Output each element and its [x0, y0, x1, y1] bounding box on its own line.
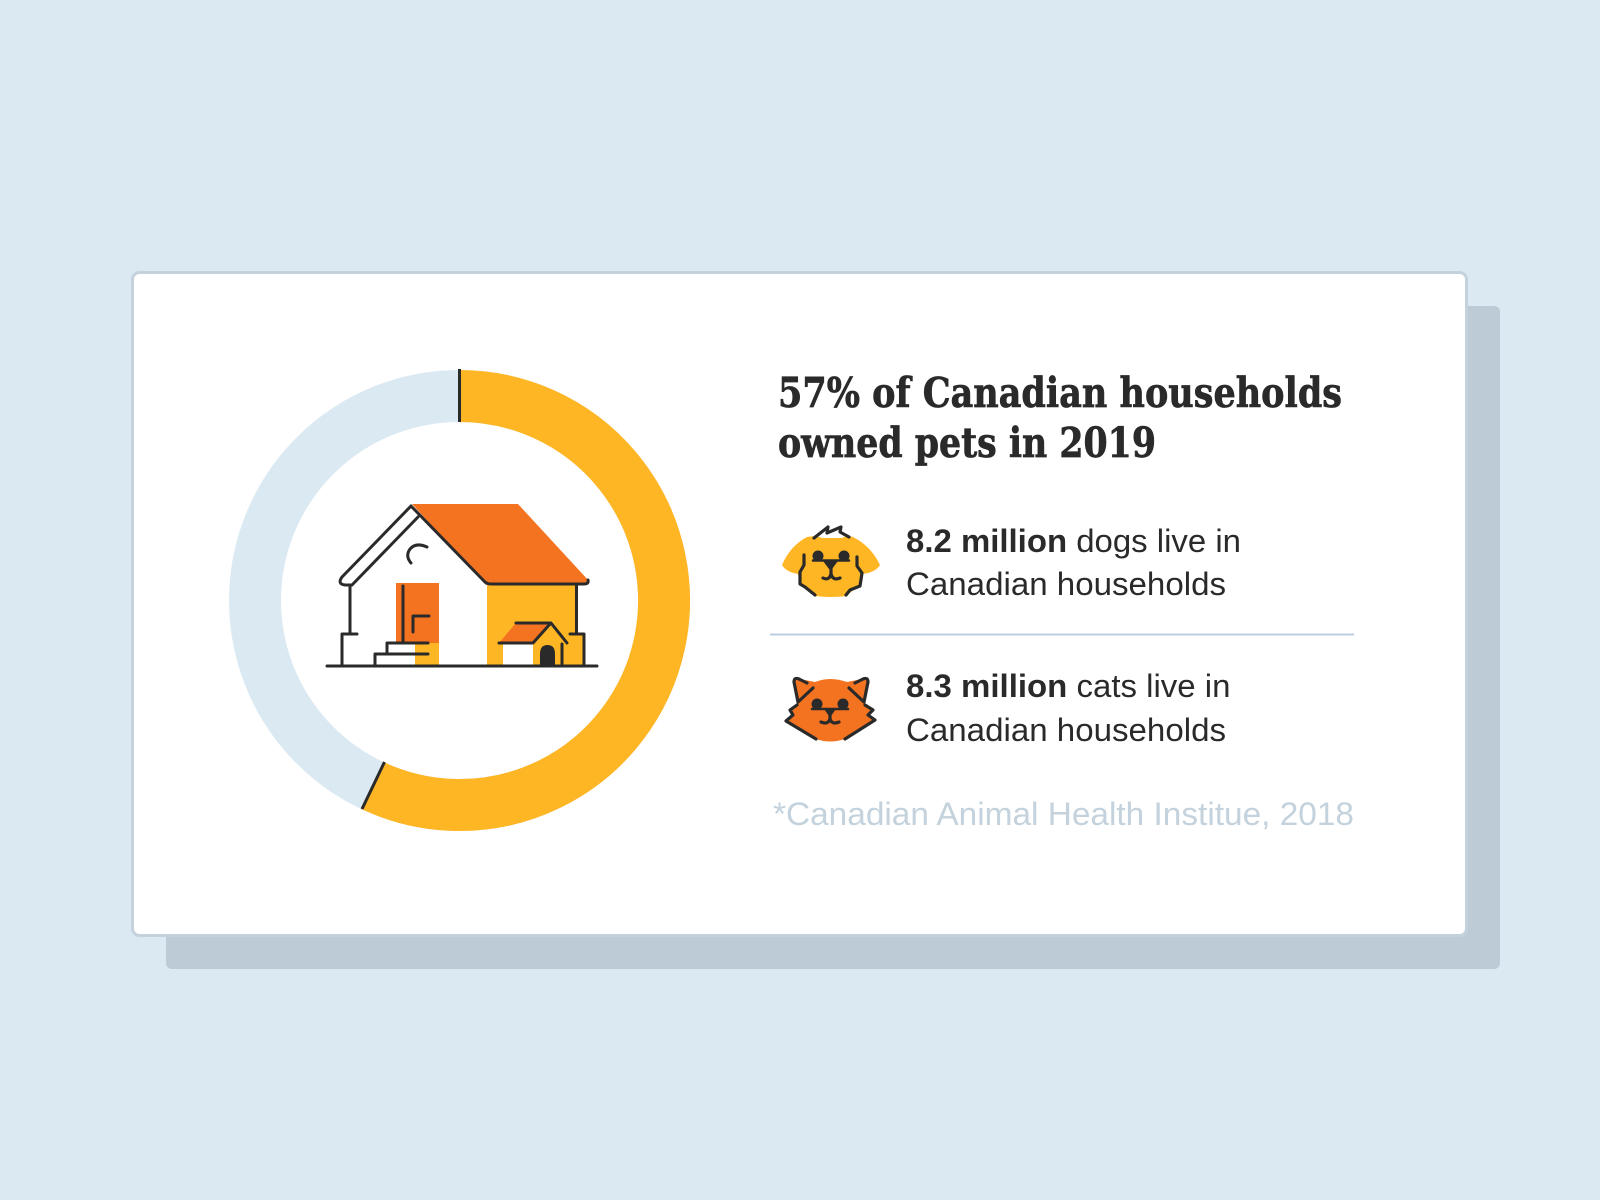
divider — [770, 634, 1354, 636]
text: dogs stat line two: Canadian households — [906, 566, 1226, 602]
heading: 57% of Canadian households — [778, 369, 1342, 417]
donut chart — [255, 369, 664, 809]
text: cats stat: 8.3 million cats live in — [906, 668, 1230, 704]
card shadow — [166, 306, 1500, 969]
icon: cat face — [786, 678, 875, 742]
text: dogs stat: 8.2 million dogs live in — [906, 523, 1241, 559]
text: cats stat line two: Canadian households — [906, 712, 1226, 748]
heading: owned pets in 2019 — [778, 419, 1156, 467]
heading — [778, 369, 1342, 467]
card panel — [132, 272, 1466, 936]
icon: house with dog house — [327, 504, 597, 666]
footnote: *Canadian Animal Health Institue, 2018 — [773, 796, 1354, 832]
icon: dog face — [782, 527, 880, 597]
